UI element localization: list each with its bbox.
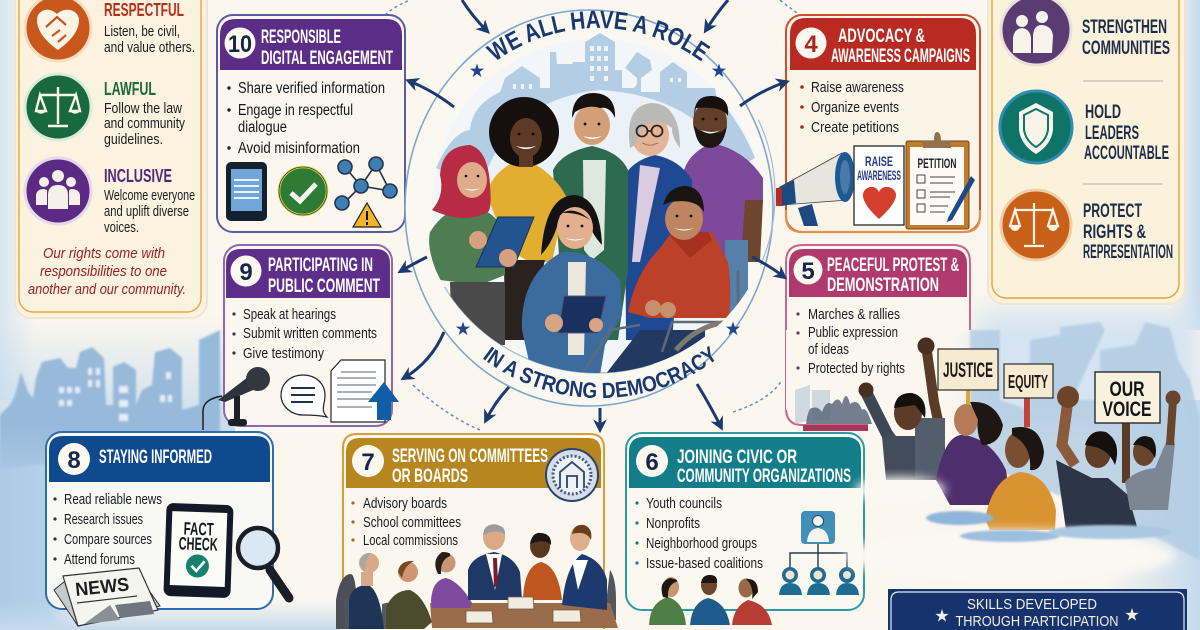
icon: document xyxy=(331,360,385,422)
heading: OR BOARDS xyxy=(392,466,468,487)
bullet list xyxy=(800,79,904,136)
label: inclusive xyxy=(104,166,195,236)
bullet list: Give testimony xyxy=(243,345,324,362)
heading: AWARENESS CAMPAIGNS xyxy=(831,46,970,67)
icon: official seal xyxy=(546,449,598,501)
bullet list: Create petitions xyxy=(811,119,899,136)
bullet list: Marches & rallies xyxy=(808,306,900,323)
icon: fact check tablet: CHECK xyxy=(178,533,218,555)
bullet list xyxy=(232,306,377,362)
bullet list: Research issues xyxy=(64,511,143,528)
group of citizens xyxy=(429,93,763,375)
stars xyxy=(456,64,740,335)
arrows from emblem to panels xyxy=(401,0,786,429)
sign: our voice xyxy=(1095,372,1160,483)
dashed connector arcs xyxy=(385,0,800,430)
person: protester in dark jacket xyxy=(1056,386,1138,530)
icon: raise awareness card: RAISE xyxy=(865,153,893,169)
tablet held by girl xyxy=(558,296,606,333)
person: woman in hijab xyxy=(429,145,505,345)
heading xyxy=(827,255,959,296)
bullet list: of ideas xyxy=(808,341,849,358)
icon: newspaper xyxy=(54,568,160,626)
panel: 10 responsible digital engagement xyxy=(217,15,405,232)
label: hold leaders accountable: HOLD xyxy=(1085,102,1121,123)
panel: rights and responsibilities xyxy=(15,0,207,318)
skyline inside emblem xyxy=(436,33,755,190)
person: man with glasses xyxy=(562,525,607,610)
heading xyxy=(392,446,548,487)
number 9 xyxy=(230,256,262,286)
person: senior man in suit xyxy=(468,524,522,600)
banner: skills developed: THROUGH PARTICIPATION xyxy=(956,614,1118,630)
label: strengthen communities xyxy=(1082,17,1170,59)
heading: PUBLIC COMMENT xyxy=(268,276,380,297)
icon: fact check tablet: FACT xyxy=(183,518,214,540)
label: respectful: Listen, be civil, xyxy=(104,23,180,40)
person: brown-haired man xyxy=(386,561,432,629)
left skyline xyxy=(0,330,220,470)
person: woman in yellow shirt xyxy=(487,97,566,340)
icon: tablet xyxy=(226,162,267,221)
heading: PEACEFUL PROTEST & xyxy=(827,255,959,276)
heading: ADVOCACY & xyxy=(838,26,925,47)
bullet list: Speak at hearings xyxy=(243,306,336,323)
sign: equity xyxy=(1004,364,1053,427)
icon: community people xyxy=(1001,0,1071,65)
bullet list: Share verified information xyxy=(238,80,385,97)
label: lawful: LAWFUL xyxy=(104,79,156,99)
icon: shield xyxy=(1000,91,1072,163)
heading: PARTICIPATING IN xyxy=(268,255,373,276)
icon: newspaper: NEWS xyxy=(74,574,130,601)
label: respectful xyxy=(104,0,195,56)
callout: rights statement: another and our community. xyxy=(28,281,186,298)
label: lawful xyxy=(104,79,185,148)
sign: justice xyxy=(938,349,998,423)
label: inclusive: INCLUSIVE xyxy=(104,166,172,186)
icon: petition clipboard: PETITION xyxy=(918,155,956,171)
bullet list: Public expression xyxy=(808,324,898,341)
number 4: 4 xyxy=(804,31,818,58)
number 7: 7 xyxy=(361,449,375,476)
panel: 7 committees or boards xyxy=(336,434,618,629)
number 9: 9 xyxy=(239,259,253,286)
person: boy in red hoodie in wheelchair xyxy=(585,186,738,375)
person: woman in purple xyxy=(431,552,472,608)
number 5: 5 xyxy=(801,258,815,285)
label: protect rights and representation xyxy=(1083,201,1173,263)
label: protect rights and representation: PROTECT xyxy=(1083,201,1142,222)
person: man in purple polo xyxy=(684,96,763,325)
icon: petition clipboard xyxy=(906,132,975,229)
number 5 xyxy=(794,256,822,285)
curved title bottom: IN A STRONG DEMOCRACY xyxy=(483,346,714,398)
number 6 xyxy=(636,445,668,477)
icon: magnifying glass xyxy=(238,528,289,598)
icon: network xyxy=(335,157,397,210)
number 4 xyxy=(796,28,826,58)
illustration: protest crowd xyxy=(845,338,1180,582)
heading xyxy=(831,26,970,67)
heading: SERVING ON COMMITTEES xyxy=(392,446,548,467)
icon: raise awareness card xyxy=(854,146,904,225)
heading: RESPONSIBLE xyxy=(261,27,341,48)
number 6: 6 xyxy=(645,449,659,476)
heading xyxy=(677,447,851,487)
callout: rights statement: responsibilities to one xyxy=(40,263,167,280)
bullet list xyxy=(351,495,461,549)
bullet list: Advisory boards xyxy=(363,495,447,512)
panel: why participation matters xyxy=(988,0,1185,304)
icon: org chart xyxy=(779,511,859,595)
icon: lawful scales xyxy=(25,74,91,140)
number 7 xyxy=(352,445,384,477)
bullet list: Nonprofits xyxy=(646,515,700,532)
bullet list: Youth councils xyxy=(646,495,722,512)
bullet list: Read reliable news xyxy=(64,491,162,508)
icon: scales xyxy=(1001,190,1071,260)
sign: our voice: OUR xyxy=(1110,378,1144,401)
sign: our voice: VOICE xyxy=(1102,398,1152,421)
icon: fact check tablet xyxy=(163,503,234,598)
bullet list xyxy=(635,495,763,572)
label: respectful: and value others. xyxy=(104,39,195,56)
bullet list: Engage in respectful xyxy=(238,102,353,119)
bullet list: Submit written comments xyxy=(243,325,377,342)
panel: 4 advocacy xyxy=(776,15,980,232)
number 10: 10 xyxy=(228,31,252,58)
heading: DEMONSTRATION xyxy=(827,275,939,296)
icon: respectful handshake xyxy=(25,0,91,61)
central emblem xyxy=(404,9,776,407)
bullet list: Raise awareness xyxy=(811,79,904,96)
watercolor mist below crowd xyxy=(845,477,1175,582)
icon: speech bubble xyxy=(281,375,327,417)
heading: STAYING INFORMED xyxy=(99,447,212,468)
person: older woman in blue jacket xyxy=(625,103,692,340)
bullet list: Attend forums xyxy=(64,551,135,568)
panel: 5 peaceful protest xyxy=(786,245,970,431)
label: inclusive: and uplift diverse xyxy=(104,203,189,220)
icon: inclusive people xyxy=(25,158,91,224)
bullet list: dialogue xyxy=(238,119,287,136)
person: protester in purple hoodie xyxy=(936,402,1008,505)
label: lawful: Follow the law xyxy=(104,100,182,117)
panel: 9 public comment xyxy=(203,245,399,430)
person: protester in grey shirt xyxy=(1125,390,1180,510)
bullet list: School committees xyxy=(363,514,461,531)
icon: warning triangle xyxy=(353,203,381,227)
bullet list xyxy=(796,306,905,377)
label: hold leaders accountable: LEADERS xyxy=(1085,123,1139,144)
heading xyxy=(268,255,380,297)
person: grey-haired man xyxy=(349,553,384,629)
number 8 xyxy=(58,443,90,475)
heading: DIGITAL ENGAGEMENT xyxy=(261,48,393,69)
banner: skills developed: SKILLS DEVELOPED xyxy=(967,597,1097,613)
panel: 8 staying informed xyxy=(46,432,289,626)
name cards xyxy=(466,597,581,623)
heading: JOINING CIVIC OR xyxy=(677,447,797,468)
bullet list: Neighborhood groups xyxy=(646,535,757,552)
label: protect rights and representation: RIGHTS & xyxy=(1083,222,1146,243)
label: inclusive: Welcome everyone xyxy=(104,187,195,204)
icon: upload arrow xyxy=(368,382,399,420)
person: young man in green jacket xyxy=(553,93,628,340)
label: inclusive: voices. xyxy=(104,219,139,236)
bullet list: Local commissions xyxy=(363,532,458,549)
person: girl in denim jacket xyxy=(522,195,622,375)
person: protester in orange sweater xyxy=(985,427,1056,530)
label: respectful: RESPECTFUL xyxy=(104,0,184,20)
sign: justice: JUSTICE xyxy=(943,359,993,382)
panel: 6 civic organizations xyxy=(626,433,864,625)
person: protester in grey jacket xyxy=(858,338,945,480)
bullet list: Organize events xyxy=(811,99,899,116)
person: man in orange xyxy=(523,533,562,600)
right skyline xyxy=(970,322,1200,560)
sign: equity: EQUITY xyxy=(1008,372,1048,392)
illustration: committee meeting xyxy=(336,524,618,629)
callout: rights statement: Our rights come with xyxy=(43,245,165,262)
illustration: crowd silhouette xyxy=(795,385,872,431)
heading: COMMUNITY ORGANIZATIONS xyxy=(677,466,851,487)
illustration: three community members xyxy=(649,575,772,625)
callout: rights statement xyxy=(28,245,186,298)
icon: raise awareness card: AWARENESS xyxy=(857,167,901,183)
heading xyxy=(261,27,393,69)
icon: verified check xyxy=(279,167,327,215)
bullet list: Avoid misinformation xyxy=(238,140,360,157)
tablet held by woman in hijab xyxy=(476,217,534,267)
label: lawful: and community xyxy=(104,115,185,132)
curved title top: WE ALL HAVE A ROLE xyxy=(485,10,710,62)
banner: skills developed xyxy=(888,589,1187,630)
bullet list xyxy=(53,491,162,568)
icon: megaphone xyxy=(776,152,855,226)
bullet list: Compare sources xyxy=(64,531,152,548)
icon: microphone xyxy=(203,367,270,430)
label: hold leaders accountable xyxy=(1084,102,1169,164)
bullet list xyxy=(227,80,385,157)
number 8: 8 xyxy=(67,447,81,474)
bullet list: Issue-based coalitions xyxy=(646,555,763,572)
bullet list: Protected by rights xyxy=(808,360,905,377)
label: lawful: guidelines. xyxy=(104,131,163,148)
